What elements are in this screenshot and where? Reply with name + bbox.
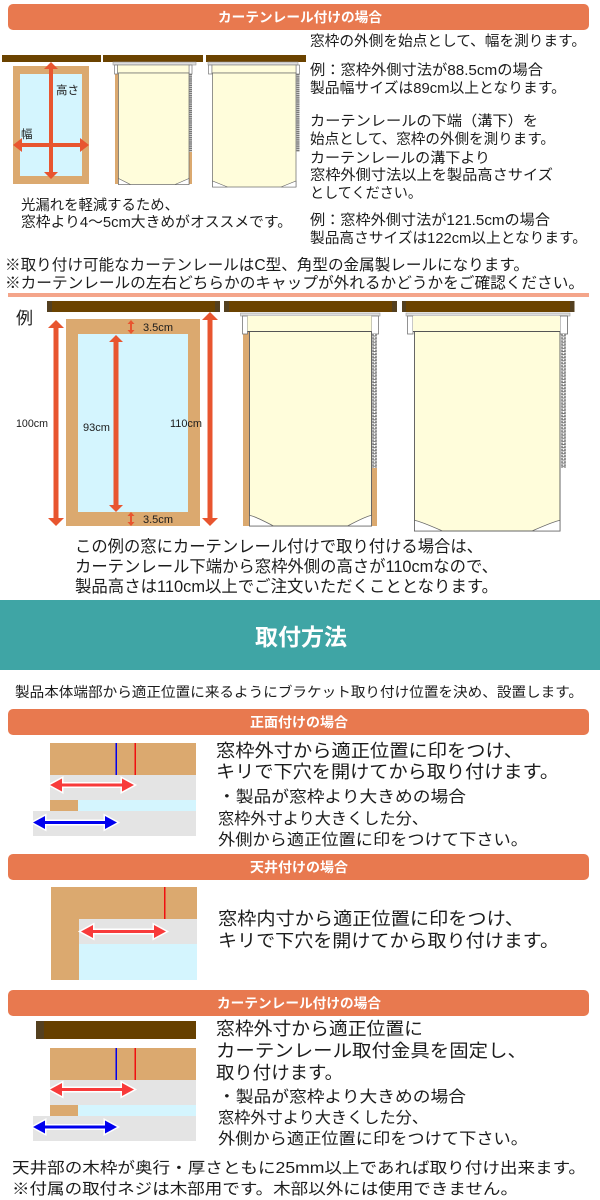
text: rail compatibility notes: [5, 256, 584, 292]
text: footer notes: [12, 1159, 586, 1198]
text: front mounting instructions: ・製品が窓枠より大きめの場合: [218, 788, 466, 806]
text: example explanation: [75, 537, 498, 596]
text: curtain rail mounting instructions: 窓枠外寸より大きくした分、: [218, 1109, 428, 1127]
text: example explanation: この例の窓にカーテンレール付けで取り付ける場合は、: [75, 537, 483, 556]
text: measuring instructions: カーテンレールの下端（溝下）を: [310, 113, 538, 130]
text: ceiling mounting instructions: [218, 909, 559, 951]
text: front mounting instructions: 窓枠外寸より大きくした分、: [218, 810, 428, 828]
text: curtain rail mounting instructions: [216, 1019, 528, 1148]
text: measuring instructions: 例：窓枠外側寸法が88.5cmの場合: [310, 62, 544, 79]
text: measuring instructions: 製品高さサイズは122cm以上となります。: [310, 230, 587, 247]
text: curtain rail mounting instructions: 取り付けます。: [216, 1063, 343, 1083]
diagram: window measuring: 高さ: [56, 84, 79, 97]
banner: installation method: [0, 600, 600, 670]
heading: front mounting: [8, 709, 589, 735]
diagram: example curtain over window: [224, 301, 397, 526]
banner: installation method: 取付方法: [255, 624, 347, 650]
diagram: example window with dimensions: 110cm: [170, 418, 202, 430]
text: footer notes: ※付属の取付ネジは木部用です。木部以外には使用できません。: [12, 1180, 518, 1198]
text: curtain rail mounting instructions: カーテンレール取付金具を固定し、: [216, 1041, 527, 1061]
heading: curtain rail mounting method: カーテンレール付けの場合: [217, 995, 382, 1011]
heading: curtain rail mounting: カーテンレール付けの場合: [218, 9, 383, 25]
diagram: example window with dimensions: [16, 301, 220, 526]
heading: ceiling mounting: [8, 854, 589, 880]
text: curtain rail mounting instructions: ・製品が窓枠より大きめの場合: [218, 1088, 466, 1106]
diagram: example window with dimensions: 3.5cm: [143, 322, 173, 334]
text: front mounting instructions: キリで下穴を開けてから取り付けます。: [216, 762, 559, 782]
heading: curtain rail mounting: [8, 4, 589, 30]
text: footer notes: 天井部の木枠が奥行・厚さともに25mm以上であれば取り付け出来ます。: [12, 1159, 586, 1177]
text: light leak note: 光漏れを軽減するため、: [21, 197, 179, 214]
text: measuring instructions: 製品幅サイズは89cm以上となります。: [310, 80, 566, 97]
heading: front mounting: 正面付けの場合: [250, 714, 349, 730]
diagram: example window with dimensions: 93cm: [83, 422, 110, 434]
text: front mounting instructions: 外側から適正位置に印をつけて下さい。: [218, 831, 528, 849]
text: front mounting instructions: 窓枠外寸から適正位置に印をつけ、: [216, 741, 523, 761]
text: measuring instructions: 窓枠外側寸法以上を製品高さサイズ: [310, 167, 553, 184]
label: example: 例: [16, 309, 33, 328]
diagram: window measuring: 幅: [21, 128, 32, 141]
text: measuring instructions: 始点として、窓枠の外側を測ります。: [310, 131, 555, 148]
text: front mounting instructions: [216, 741, 559, 849]
text: measuring instructions: 例：窓枠外側寸法が121.5cmの場合: [310, 212, 551, 229]
text: example explanation: 製品高さは110cm以上でご注文いただくこととなります。: [75, 577, 498, 596]
text: light leak note: 窓枠より4～5cm大きめがオススメです。: [21, 214, 292, 231]
text: rail compatibility notes: ※カーテンレールの左右どちらかのキャップが外れるかどうかをご確認ください。: [5, 274, 584, 292]
text: rail compatibility notes: ※取り付け可能なカーテンレールはC型、角型の金属製レールになります。: [5, 256, 529, 274]
diagram: curtain rail mounting: [33, 1021, 196, 1141]
text: curtain rail mounting instructions: 外側から適正位置に印をつけて下さい。: [218, 1130, 528, 1148]
diagram: example window with dimensions: 3.5cm: [143, 514, 173, 526]
text: example explanation: カーテンレール下端から窓枠外側の高さが110cmなので、: [75, 557, 498, 576]
text: ceiling mounting instructions: キリで下穴を開けてから取り付けます。: [218, 931, 559, 951]
heading: curtain rail mounting method: [8, 990, 589, 1016]
diagram: front mounting: [33, 743, 196, 836]
diagram: ceiling mounting: [51, 887, 197, 980]
text: ceiling mounting instructions: 窓枠内寸から適正位置に印をつけ、: [218, 909, 524, 929]
text: installation intro: 製品本体端部から適正位置に来るようにブラケット取り付け位置を決め、設置します。: [15, 684, 583, 700]
text: measuring instructions: カーテンレールの溝下より: [310, 150, 490, 167]
diagram: example window with dimensions: 100cm: [16, 418, 48, 430]
text: curtain rail mounting instructions: 窓枠外寸から適正位置に: [216, 1019, 423, 1039]
heading: ceiling mounting: 天井付けの場合: [250, 859, 349, 875]
text: measuring instructions: としてください。: [310, 185, 422, 202]
diagram: window measuring: [2, 55, 101, 184]
diagram: curtain larger than window: [206, 55, 306, 187]
diagram: curtain over window frame: [103, 55, 203, 184]
text: measuring instructions: [310, 33, 587, 247]
text: measuring instructions: 窓枠の外側を始点として、幅を測ります。: [310, 33, 586, 50]
text: light leak note: [21, 197, 292, 231]
diagram: example curtain larger than window: [402, 301, 574, 531]
